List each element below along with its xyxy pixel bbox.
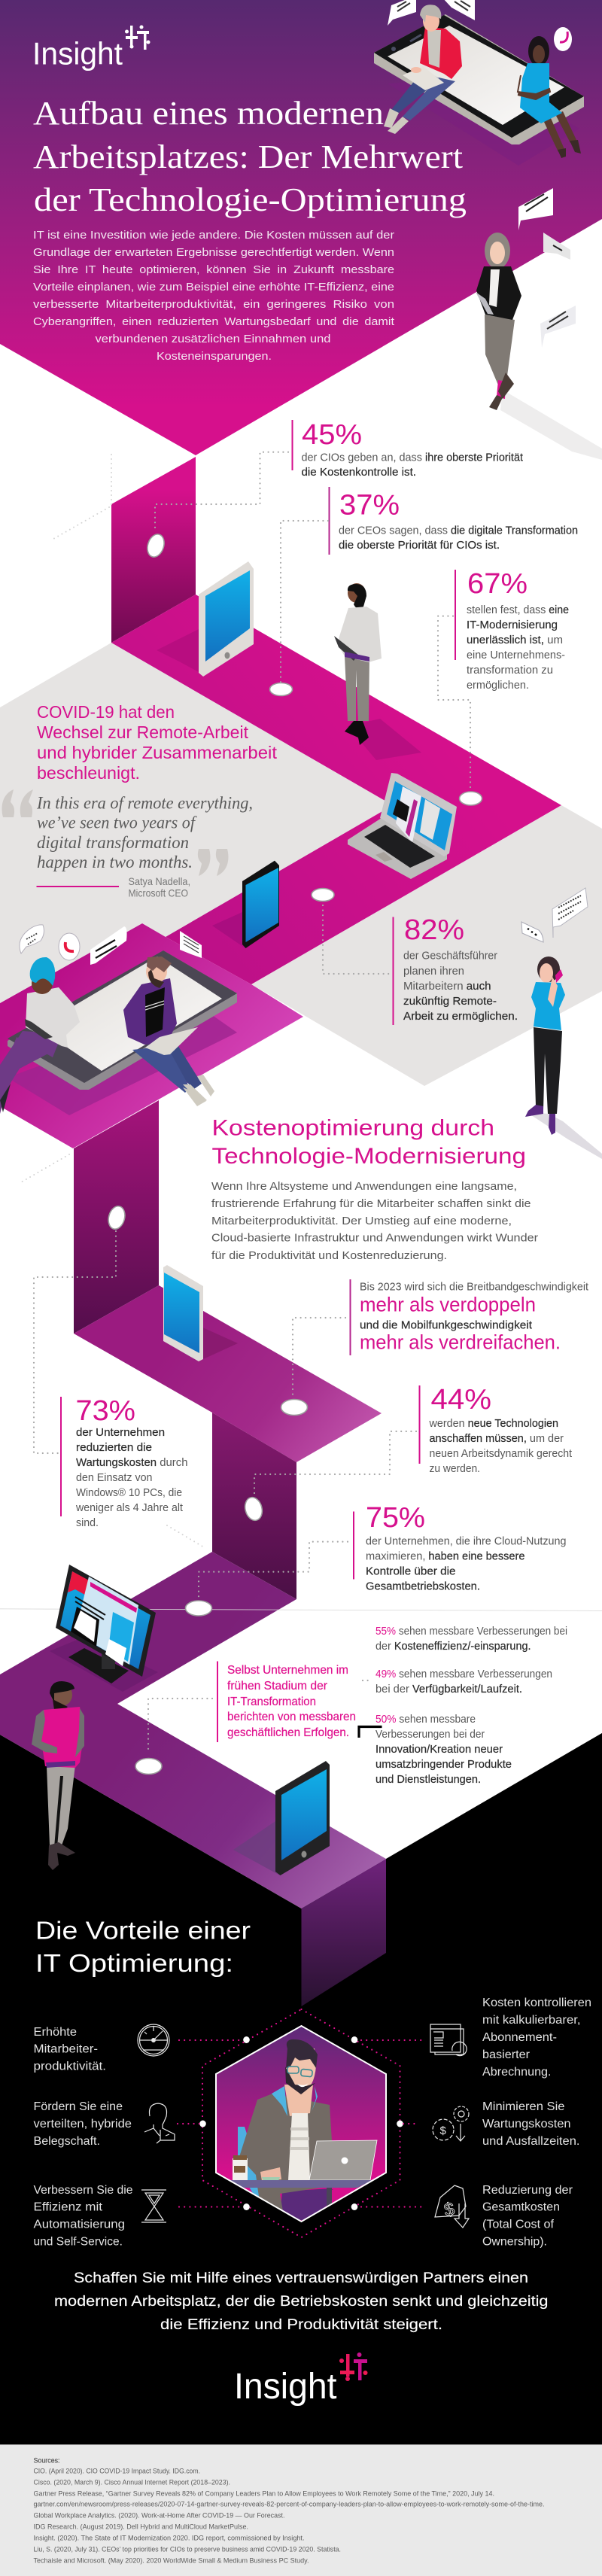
benefit texts right: basierter — [482, 2048, 530, 2061]
logo: Insight (top): Insight — [32, 36, 123, 71]
list: improvements: der Kosteneffizienz/-einsparung. — [375, 1640, 531, 1653]
benefit texts left: Belegschaft. — [33, 2135, 100, 2148]
stat: broadband speed — [349, 1279, 589, 1355]
sources footer — [0, 2444, 602, 2576]
benefit texts right: Kosten kontrollieren — [482, 1997, 591, 2009]
icon: price tag — [435, 2185, 469, 2228]
icon: person — [144, 2103, 175, 2143]
icon: gears with dollar: $ — [439, 2124, 447, 2137]
list: improvements: umsatzbringender Produkte — [375, 1758, 512, 1771]
benefit texts right: Ownership). — [482, 2235, 547, 2249]
background: purple header — [0, 0, 602, 455]
heading: benefits: IT Optimierung: — [35, 1949, 233, 1977]
speech bubbles on top — [388, 0, 572, 51]
benefit texts right: und Ausfallzeiten. — [482, 2135, 579, 2148]
illustration: woman with black jacket and tablet — [476, 233, 602, 460]
benefit texts right: Abonnement- — [482, 2031, 557, 2044]
stat: 67%: 67% — [467, 568, 528, 600]
quote: Microsoft CEO — [128, 887, 188, 899]
quote: happen in two months. — [37, 853, 193, 871]
heading: Kostenoptimierung: Technologie-Modernisierung — [212, 1144, 526, 1169]
title: Aufbau eines modernen — [33, 95, 384, 132]
benefit texts right: Reduzierung der — [482, 2184, 573, 2197]
isometric path: magenta and purple walkway — [0, 457, 602, 2444]
benefit texts right: Minimieren Sie — [482, 2100, 564, 2113]
stat: 73%: Windows® 10 PCs, die — [76, 1486, 182, 1499]
list: improvements: bei der Verfügbarkeit/Laufzeit. — [375, 1683, 522, 1696]
black corner mark — [359, 1726, 382, 1738]
stat: 44%: 44% — [430, 1384, 491, 1416]
background: gray panels — [0, 643, 602, 1086]
illustration: two people on large tablet — [0, 925, 237, 1115]
benefit texts left: produktivität. — [33, 2060, 106, 2073]
icon: document with refresh — [430, 2024, 467, 2056]
stat: 75%: 75% — [366, 1502, 425, 1534]
list: improvements — [375, 1625, 567, 1786]
paragraph: legacy systems: Cloud-basierte Infrastruktur und Anwendungen wirkt Wunder — [211, 1231, 538, 1245]
stat: 73%: den Einsatz von — [76, 1471, 152, 1484]
stat: 37%: die oberste Priorität für CIOs ist. — [339, 539, 500, 552]
heading: Kostenoptimierung: Kostenoptimierung durch — [212, 1115, 494, 1141]
closing statement: modernen Arbeitsplatz, der die Betriebskosten senkt und gleichzeitig — [54, 2294, 548, 2310]
heading: benefits: Die Vorteile einer — [35, 1916, 251, 1945]
stat: 73%: weniger als 4 Jahre alt — [75, 1501, 184, 1514]
illustration: speech bubbles right — [518, 188, 576, 348]
heading: COVID-19: Wechsel zur Remote-Arbeit — [37, 722, 249, 742]
heading: COVID-19: beschleunigt. — [37, 763, 140, 783]
closing statement — [54, 2270, 548, 2333]
thin divider line — [0, 1609, 602, 1611]
title: Arbeitsplatzes: Der Mehrwert — [33, 138, 463, 175]
intro paragraph: Sie Ihre IT heute optimieren, können Sie in Zukunft messbare — [33, 263, 394, 276]
heading: COVID-19: COVID-19 hat den — [37, 702, 175, 722]
connector dots — [21, 452, 470, 1753]
benefits hexagon with designer illustration — [178, 2009, 424, 2237]
logo: Insight (bottom) — [234, 2352, 367, 2407]
stat: 75%: maximieren, haben eine bessere — [366, 1550, 525, 1562]
stat: 75%: der Unternehmen, die ihre Cloud-Nutzung — [366, 1535, 566, 1547]
paragraph: legacy systems: Mitarbeiterproduktivität. Der Umstieg auf eine moderne, — [211, 1215, 512, 1227]
stat: 67%: stellen fest, dass eine — [467, 604, 569, 616]
paragraph: legacy systems: für die Produktivität und Kostenreduzierung. — [211, 1249, 447, 1262]
stat: broadband speed: mehr als verdreifachen. — [360, 1331, 561, 1353]
callout: early stage transformation: berichten von messbaren — [227, 1711, 356, 1723]
closing statement: die Effizienz und Produktivität steigert. — [160, 2317, 442, 2333]
stat: 82%: planen ihren — [403, 965, 464, 978]
heading: Kostenoptimierung — [212, 1115, 526, 1169]
icon: price tag: $ — [442, 2199, 456, 2221]
sources footer: IDG Research. (August 2019). Dell Hybrid and MultiCloud MarketPulse. — [33, 2523, 248, 2532]
icon: hourglass — [141, 2190, 166, 2222]
benefit texts right: (Total Cost of — [482, 2219, 555, 2231]
benefit texts left — [33, 2026, 132, 2249]
list: improvements: Innovation/Kreation neuer — [375, 1743, 503, 1756]
illustration: black tablet — [233, 1761, 330, 1875]
illustration: man with tablet on walkway — [334, 583, 421, 760]
stat: 82%: Arbeit zu ermöglichen. — [403, 1010, 518, 1023]
benefit texts right: Gesamtkosten — [482, 2200, 560, 2214]
stat: 45%: die Kostenkontrolle ist. — [301, 466, 416, 479]
stat: 45% — [292, 419, 524, 479]
stat: 82%: 82% — [404, 914, 464, 946]
benefit texts left: Fördern Sie eine — [33, 2100, 123, 2113]
stat: 37%: 37% — [339, 489, 400, 521]
stat: 73% — [60, 1395, 187, 1529]
sources footer: Insight. (2020). The State of IT Modernization 2020. IDG report, commissioned by Insight. — [33, 2535, 304, 2542]
sources footer: Liu, S. (2020, July 31). CEOs’ top priorities for CIOs to preserve business amid COVID-19 2020. Statista. — [33, 2545, 341, 2554]
intro paragraph: verbesserte Mitarbeiterproduktivität, ein geringeres Risiko von — [33, 298, 394, 311]
benefit texts left: Mitarbeiter- — [33, 2042, 98, 2056]
callout: early stage transformation — [217, 1662, 356, 1742]
benefit texts right: mit kalkulierbarer, — [482, 2014, 581, 2027]
stat: broadband speed: und die Mobilfunkgeschwindigkeit — [360, 1318, 533, 1332]
heading: COVID-19: und hybrider Zusammenarbeit — [37, 743, 278, 762]
stat: 45%: 45% — [302, 419, 362, 451]
illustration: white tablet — [157, 561, 254, 677]
sources footer: Sources: — [33, 2456, 60, 2465]
illustration: laptop — [348, 773, 457, 879]
list: improvements: 49% sehen messbare Verbesserungen — [375, 1668, 552, 1680]
quote — [2, 789, 253, 899]
sources footer: gartner.com/en/newsroom/press-releases/2020-07-14-gartner-survey-reveals-82-percent-of-company-leaders-plan-to-allow-employees-to-work-remotely-some-of-the-time. — [33, 2500, 545, 2509]
person: left with turban — [0, 957, 80, 1114]
stat: 82%: der Geschäftsführer — [403, 950, 497, 962]
title: der Technologie-Optimierung — [34, 181, 467, 218]
chat bubbles on left — [20, 925, 202, 965]
person: man with red jacket — [384, 5, 462, 134]
illustration: man with pink vest — [32, 1681, 84, 1870]
intro paragraph: Kosteneinsparungen. — [157, 350, 272, 363]
heading: benefits — [35, 1916, 251, 1977]
quote: we’ve seen two years of — [37, 813, 197, 832]
closing statement: Schaffen Sie mit Hilfe eines vertrauenswürdigen Partners einen — [74, 2270, 528, 2286]
callout: early stage transformation: Selbst Unternehmen im — [227, 1664, 348, 1677]
speech bubbles near woman on phone — [521, 888, 588, 942]
logo: Insight (bottom): Insight — [234, 2367, 337, 2407]
stat: 44%: werden neue Technologien — [429, 1417, 558, 1430]
intro paragraph: IT ist eine Investition wie jede andere. Die Kosten müssen auf der — [33, 229, 394, 242]
benefit texts right: Wartungskosten — [482, 2118, 570, 2130]
stat: 73%: Wartungskosten durch — [76, 1456, 187, 1469]
icon: gauge — [138, 2024, 169, 2056]
stat: 82%: zukünftig Remote- — [403, 995, 497, 1008]
list: improvements: 50% sehen messbare — [375, 1713, 476, 1726]
logo: Insight (top) — [32, 26, 150, 71]
stat: 44%: zu werden. — [429, 1462, 480, 1475]
list: improvements: und Dienstleistungen. — [375, 1773, 481, 1786]
benefit texts right — [482, 1997, 591, 2249]
benefit texts left: und Self-Service. — [33, 2235, 123, 2249]
stat: 75%: Gesamtbetriebskosten. — [366, 1580, 480, 1592]
sources footer: CIO. (April 2020). CIO COVID-19 Impact Study. IDG.com. — [33, 2467, 200, 2476]
intro paragraph: verbundenen zusätzlichen Einnahmen und — [95, 333, 331, 345]
stat: 44%: neuen Arbeitsdynamik gerecht — [429, 1447, 573, 1460]
intro paragraph: Grundlage der erwarteten Ergebnisse gerechtfertigt werden. Wenn — [33, 246, 394, 259]
quote: In this era of remote everything, — [36, 793, 253, 813]
stat: 73%: sind. — [76, 1516, 99, 1529]
stat: 67%: unerlässlich ist, um — [467, 634, 563, 646]
paragraph: legacy systems: Wenn Ihre Altsysteme und Anwendungen eine langsame, — [211, 1180, 517, 1193]
quote: digital transformation — [37, 833, 189, 852]
illustration: white phone on purple floor — [163, 1265, 238, 1361]
stat: 37%: der CEOs sagen, dass die digitale Transformation — [339, 524, 578, 537]
person: woman in blue dress — [518, 36, 581, 158]
benefit texts left: verteilten, hybride — [33, 2118, 132, 2130]
intro paragraph — [33, 229, 395, 363]
sources footer: Techaisle and Microsoft. (May 2020). 2020 WorldWide Small & Medium Business PC Study. — [33, 2557, 309, 2565]
benefit texts left: Automatisierung — [33, 2219, 125, 2231]
sources footer: Global Workplace Analytics. (2020). Work-at-Home After COVID-19 — Our Forecast. — [33, 2512, 284, 2520]
stat: 73%: reduzierten die — [76, 1441, 152, 1454]
paragraph: legacy systems — [211, 1180, 538, 1262]
callout: early stage transformation: geschäftlichen Erfolgen. — [227, 1726, 349, 1739]
title — [33, 95, 467, 218]
button nodes — [106, 532, 482, 1775]
benefit texts right: Abrechnung. — [482, 2066, 551, 2079]
heading: COVID-19 — [37, 702, 278, 783]
stat: 67%: IT-Modernisierung — [467, 619, 558, 631]
illustration: large phone with two people — [374, 0, 584, 166]
paragraph: legacy systems: frustrierende Erfahrung für die Mitarbeiter schaffen sinkt die — [211, 1197, 531, 1210]
stat: 44%: anschaffen müssen, um der — [429, 1432, 564, 1445]
callout: early stage transformation: frühen Stadium der — [227, 1680, 328, 1692]
stat: 75%: Kontrolle über die — [366, 1565, 456, 1577]
sources footer: Gartner Press Release, “Gartner Survey Reveals 82% of Company Leaders Plan to Allow Employees to Work Remotely Some of the Time,” 2020, July 14. — [33, 2489, 494, 2498]
stat: 82% — [393, 914, 518, 1025]
icon: gears with dollar — [433, 2106, 469, 2141]
callout: early stage transformation: IT-Transformation — [227, 1696, 316, 1708]
illustration: desktop monitor — [50, 1565, 158, 1692]
intro paragraph: Cyberangriffen, einen reduzierten Wartungsbedarf und die damit — [33, 315, 395, 328]
benefit texts left: Erhöhte — [33, 2026, 77, 2039]
stat: 37% — [328, 487, 578, 555]
sources footer: Cisco. (2020, March 9). Cisco Annual Internet Report (2018–2023). — [33, 2479, 230, 2486]
person: right with laptop — [123, 956, 214, 1106]
list: improvements: 55% sehen messbare Verbesserungen bei — [375, 1625, 567, 1638]
stat: 45%: der CIOs geben an, dass ihre oberste Priorität — [301, 452, 524, 464]
stat: 82%: Mitarbeitern auch — [403, 980, 491, 993]
stat: broadband speed: mehr als verdoppeln — [360, 1293, 536, 1315]
stat: 75% — [353, 1502, 566, 1592]
illustration: woman with blue t-shirt on phone — [525, 956, 602, 1159]
intro paragraph: Vorteile einplanen, wie zum Beispiel eine erhöhte IT-Effizienz, eine — [33, 281, 394, 293]
stat: 73%: 73% — [75, 1395, 135, 1427]
stat: broadband speed: Bis 2023 wird sich die Breitbandgeschwindigkeit — [360, 1281, 589, 1293]
stat: 67%: eine Unternehmens- — [467, 649, 565, 661]
stat: 73%: der Unternehmen — [76, 1426, 165, 1439]
list: improvements: Verbesserungen bei der — [375, 1728, 485, 1741]
benefit texts left: Effizienz mit — [33, 2200, 103, 2214]
illustration: black smartphone — [212, 861, 279, 948]
stat: 67% — [455, 568, 569, 692]
stat: 67%: ermöglichen. — [467, 679, 529, 692]
benefit texts left: Verbessern Sie die — [33, 2184, 132, 2197]
stat: 44% — [418, 1384, 573, 1475]
stat: 67%: transformation zu — [467, 664, 553, 677]
quote: Satya Nadella, — [128, 875, 190, 887]
